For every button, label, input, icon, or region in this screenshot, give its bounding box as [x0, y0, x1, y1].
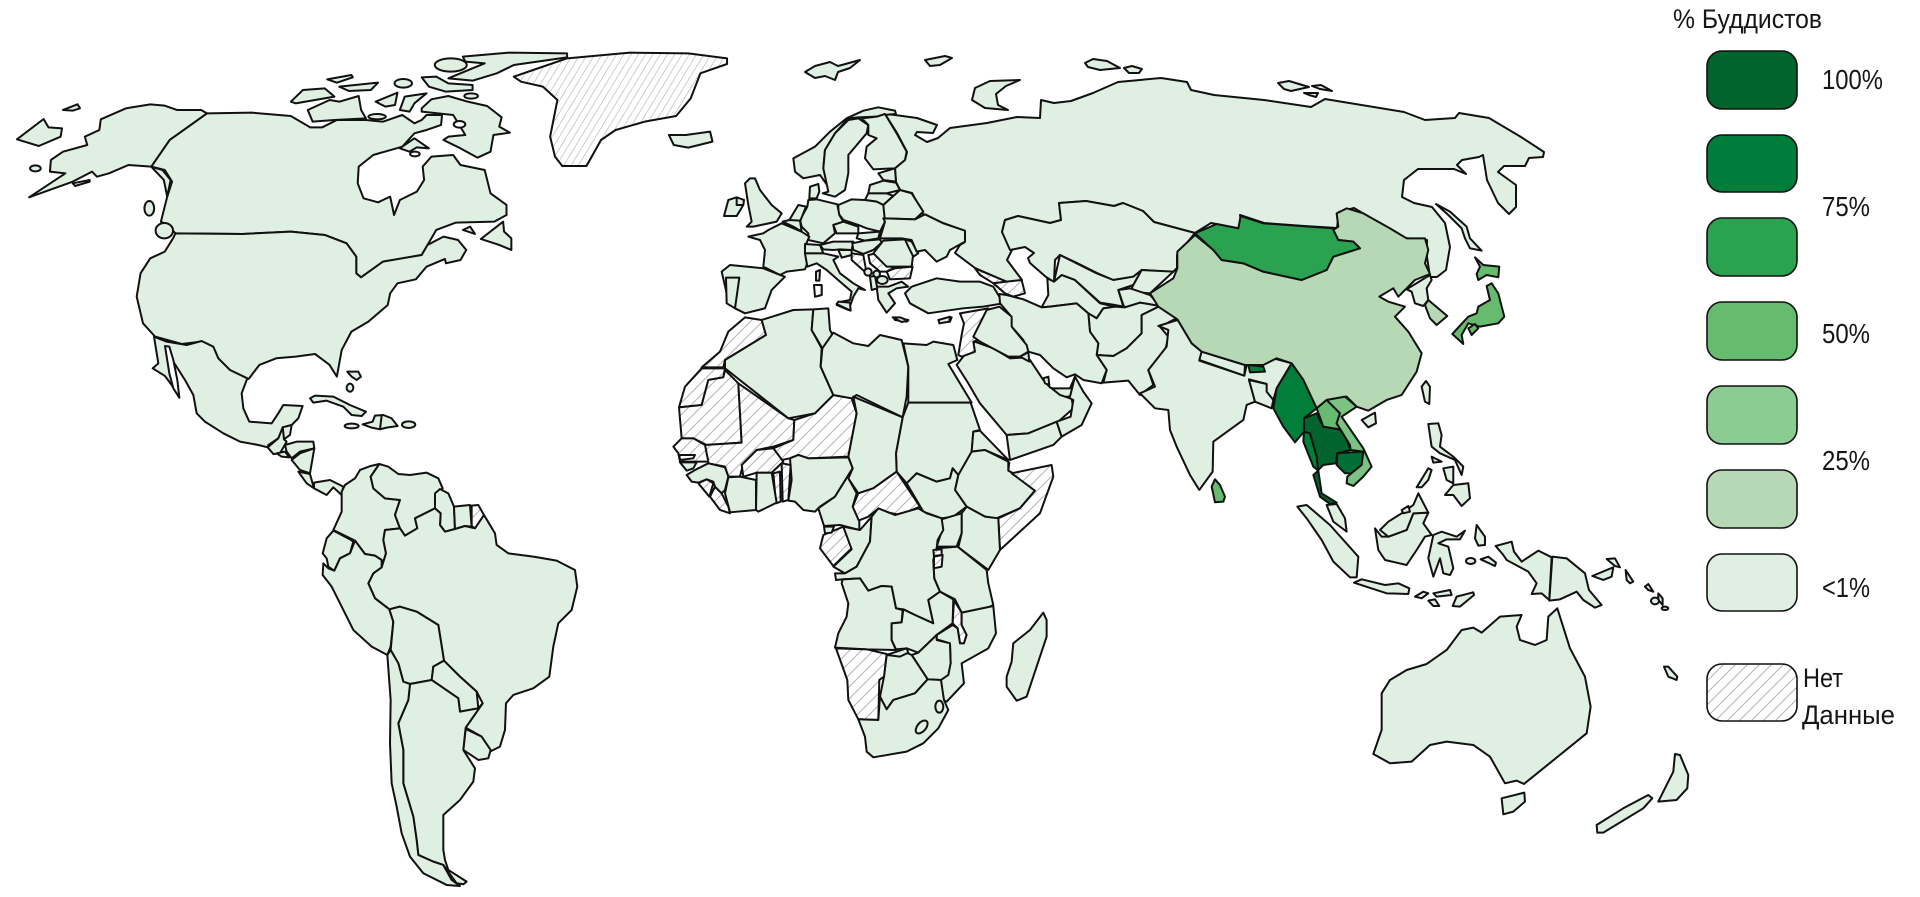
- arctic russian islands: [805, 56, 1332, 110]
- country: Vietnam: [1327, 397, 1372, 486]
- region: Europe: [722, 107, 1025, 322]
- country: Cambodia: [1337, 452, 1363, 473]
- region: Africa north and Arabia: [673, 285, 1073, 570]
- country: Alaska: [29, 104, 207, 197]
- country: Greenland (no data): [514, 53, 727, 166]
- region: Russia: [885, 78, 1544, 282]
- country: New Zealand: [1597, 754, 1688, 833]
- country: Madagascar: [1007, 613, 1047, 701]
- country: Mongolia: [1195, 216, 1360, 280]
- country: Myanmar: [1273, 363, 1317, 442]
- country: Afghanistan: [1088, 303, 1160, 356]
- swatch: 75% lower: [1707, 218, 1797, 276]
- country: Algeria: [725, 309, 833, 418]
- region: Middle East and Central Asia: [973, 255, 1177, 437]
- country: Italy: [805, 253, 865, 310]
- country: Bhutan: [1248, 365, 1265, 372]
- country: Egypt: [903, 342, 972, 403]
- swatch: 75% upper: [1707, 135, 1797, 192]
- region: North America and Greenland: [17, 53, 727, 379]
- country: Kazakhstan: [1002, 201, 1195, 282]
- swatch: 25% lower: [1707, 470, 1797, 528]
- country: Turkey: [905, 278, 1003, 313]
- country: Chile: [387, 650, 460, 886]
- region: Central America and Caribbean: [153, 337, 415, 495]
- country: Spain: [722, 265, 785, 313]
- north pacific and atlantic islands: [17, 104, 511, 250]
- country: Thailand: [1304, 413, 1351, 470]
- arctic islands: [291, 53, 567, 158]
- label: 100%: 100%: [1822, 64, 1883, 95]
- country: Brazil: [368, 508, 577, 752]
- country: Sudan: [896, 403, 980, 483]
- country: France: [748, 223, 809, 275]
- country: DR Congo: [835, 508, 943, 623]
- swatch: under 1%: [1707, 554, 1797, 611]
- caribbean islands: [310, 372, 415, 429]
- country: Saudi Arabia: [957, 342, 1073, 435]
- swatch: 50%: [1707, 302, 1797, 360]
- country: South Africa: [858, 679, 948, 757]
- country: Ethiopia: [955, 450, 1035, 518]
- label: 50%: 50%: [1822, 318, 1870, 349]
- legend: [1673, 4, 1895, 730]
- country: Mexico: [153, 337, 303, 447]
- label: no data line 1: Нет: [1803, 663, 1843, 693]
- country: Philippines: [1417, 423, 1470, 506]
- label: 25%: 25%: [1822, 445, 1870, 476]
- country: Pakistan: [1097, 306, 1177, 395]
- country: Iceland: [669, 132, 713, 148]
- swatch: 25% upper: [1707, 386, 1797, 444]
- country: Canada: [151, 113, 507, 277]
- country: Iran: [999, 294, 1107, 383]
- swatch: no data: [1707, 664, 1797, 721]
- region: Indonesia and Oceania: [1297, 493, 1688, 833]
- country: Japan: [1452, 257, 1504, 344]
- country: Angola: [835, 578, 903, 650]
- label: no data line 2: Данные: [1802, 700, 1895, 730]
- label: 75%: 75%: [1822, 191, 1870, 222]
- country: India: [1140, 320, 1292, 490]
- country: United States: [137, 232, 466, 379]
- region: East and South Asia: [1140, 204, 1504, 532]
- island: Sakhalin: [1436, 204, 1482, 251]
- country: China: [1150, 208, 1430, 411]
- country: Ukraine: [880, 214, 965, 262]
- country: Nigeria: [788, 455, 853, 512]
- country: Libya: [821, 333, 908, 417]
- country: Laos: [1317, 400, 1351, 450]
- country: Sri Lanka: [1212, 479, 1225, 502]
- swatch: 100%: [1707, 51, 1797, 109]
- country: Iraq: [973, 307, 1028, 357]
- country: United Kingdom: [745, 178, 782, 227]
- country: Yemen: [1007, 422, 1062, 460]
- country: Chad: [848, 397, 903, 493]
- legend title: % Буддистов: [1673, 4, 1822, 34]
- country: Argentina: [398, 680, 483, 884]
- region: Africa south: [820, 508, 1047, 757]
- region: South America: [323, 464, 577, 886]
- label: under 1%: <1%: [1822, 572, 1870, 603]
- country: Namibia (no data): [836, 648, 887, 720]
- country: Australia: [1373, 608, 1591, 784]
